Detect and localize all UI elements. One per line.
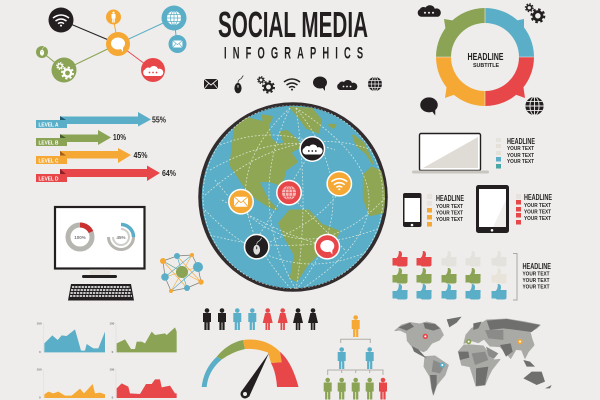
network diagram <box>36 6 186 82</box>
thumbs legend: YOUR TEXT <box>522 272 550 278</box>
laptop legend: YOUR TEXT <box>507 153 535 159</box>
globe nodes <box>229 137 351 259</box>
thumbs legend: YOUR TEXT <box>522 278 550 284</box>
axis labels: 100 <box>109 367 115 371</box>
axis labels: 0 <box>39 350 41 354</box>
axis labels: 100 <box>37 322 42 326</box>
phone <box>403 193 422 227</box>
tablet <box>476 185 509 233</box>
level B: LEVEL B <box>38 140 59 146</box>
level C <box>36 148 148 164</box>
tablet legend: YOUR TEXT <box>524 216 552 222</box>
laptop legend: YOUR TEXT <box>507 146 535 152</box>
donut label <box>468 51 504 69</box>
desktop monitor <box>55 207 144 278</box>
axis labels: 0 <box>39 395 41 399</box>
thumbs-up rating grid <box>392 251 507 300</box>
chart: blue <box>44 329 105 352</box>
laptop legend: YOUR TEXT <box>507 159 535 165</box>
chart: green <box>117 327 177 352</box>
world map <box>395 317 552 395</box>
thumbs legend: YOUR TEXT <box>522 284 550 290</box>
icon row <box>204 76 382 93</box>
globe <box>200 104 390 290</box>
land masses <box>203 105 390 290</box>
level D <box>36 166 176 182</box>
donut label: HEADLINE <box>468 51 504 63</box>
donut: 100%: 100% <box>74 235 86 240</box>
tablet legend: YOUR TEXT <box>524 203 552 209</box>
tablet legend: YOUR TEXT <box>524 210 552 216</box>
tablet legend: HEADLINE <box>524 193 552 202</box>
axis labels: 100 <box>37 367 42 371</box>
bar arrows <box>36 112 176 182</box>
chart: orange <box>44 384 105 398</box>
level C: LEVEL C <box>38 158 59 164</box>
donut: 45%: 45% <box>116 235 126 240</box>
org chart <box>324 315 387 400</box>
keyboard <box>68 284 134 300</box>
chart: red <box>117 379 177 398</box>
laptop <box>412 134 489 174</box>
phone legend <box>427 194 464 226</box>
node network <box>160 253 204 293</box>
title: SOCIAL MEDIA <box>218 4 368 45</box>
level D: 64% <box>162 168 176 178</box>
laptop legend <box>496 137 535 168</box>
title: INFOGRAPHICS <box>224 44 363 62</box>
thumbs legend: HEADLINE <box>522 262 551 271</box>
gauge needle <box>240 353 269 398</box>
axes <box>43 323 116 398</box>
laptop legend: HEADLINE <box>507 137 535 146</box>
phone legend: YOUR TEXT <box>436 204 464 210</box>
level B: 10% <box>113 132 126 142</box>
level A: LEVEL A <box>38 122 59 128</box>
axis labels: 0 <box>112 395 114 399</box>
level D: LEVEL D <box>38 176 59 182</box>
gauge <box>202 339 298 398</box>
level B <box>36 130 126 146</box>
map pins <box>423 334 523 368</box>
axis labels: 0 <box>112 350 114 354</box>
phone legend: YOUR TEXT <box>436 210 464 216</box>
donut corner icons <box>418 4 544 115</box>
phone legend: YOUR TEXT <box>436 217 464 223</box>
thumbs legend <box>513 254 551 300</box>
level C: 45% <box>134 150 148 160</box>
axis labels: 100 <box>109 322 115 326</box>
axis labels <box>37 322 115 399</box>
tablet legend <box>516 193 552 224</box>
title <box>218 4 368 62</box>
donut label: SUBTITLE <box>473 63 499 69</box>
level A <box>36 112 166 128</box>
donut chart <box>436 8 534 106</box>
level A: 55% <box>152 114 166 124</box>
people row <box>203 308 318 330</box>
area charts <box>37 322 177 399</box>
phone legend: HEADLINE <box>436 194 464 203</box>
